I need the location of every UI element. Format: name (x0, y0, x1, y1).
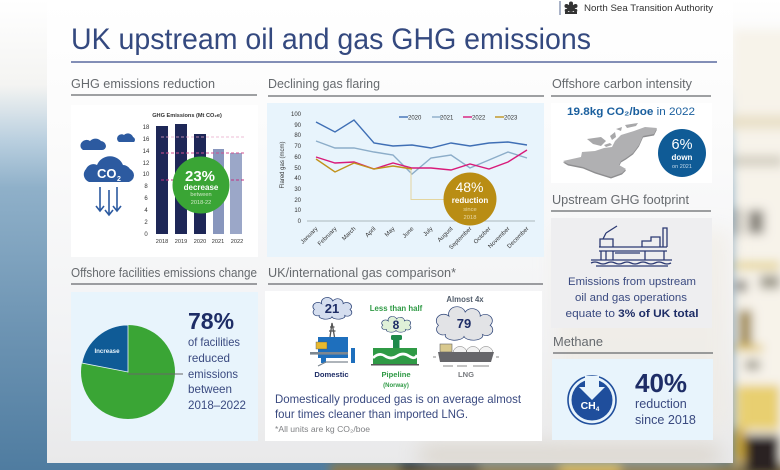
panel: GHG emissions reduction (71, 76, 258, 257)
panel: offshore carbon intensity: Offshore carbon intensity (552, 76, 692, 91)
pie chart: 78% reduced: Increase (94, 348, 120, 355)
note: units: *All units are kg CO₂/boe (275, 424, 370, 434)
logo: North Sea Transition Authority (560, 1, 714, 15)
line chart: flared gas by month: July (423, 226, 434, 238)
stat: 78% of facilities (188, 308, 246, 412)
stat: 40% reduction: reduction (635, 397, 687, 411)
bar chart: GHG emissions: 2021 (212, 239, 224, 245)
bar chart: GHG emissions: 14 (143, 149, 150, 155)
callout: 48% reduction: 48% (455, 179, 484, 195)
line chart: flared gas by month: October (473, 226, 492, 246)
panel: upstream GHG footprint: Upstream GHG footprint (552, 192, 689, 207)
callout: 48% reduction (444, 172, 496, 226)
bar chart: GHG emissions: GHG Emissions (Mt CO₂e) (152, 113, 222, 119)
bar chart: GHG emissions: 2 (144, 220, 148, 226)
domestic: cloud and platform (310, 297, 355, 379)
bar chart: GHG emissions: 2022 (231, 239, 243, 245)
line chart: flared gas by month: 10 (294, 208, 302, 214)
icon: CH4 down arrow: CH (581, 400, 596, 412)
text: 3% of UK total: equate to 3% of UK total (566, 308, 698, 320)
callout: 23% decrease: 23% (185, 168, 215, 185)
line chart: flared gas by month: 80 (294, 133, 302, 139)
callout: 23% decrease: decrease (184, 183, 219, 192)
callout: 23% decrease: 2018-22 (191, 200, 211, 206)
callout: 6% down (658, 129, 706, 177)
legend (399, 116, 518, 122)
pipeline: cloud and pipe (370, 304, 423, 389)
line chart: flared gas by month: March (341, 226, 357, 242)
text: comparison statement (275, 392, 522, 421)
line chart: flared gas by month: 30 (294, 187, 302, 193)
bar chart: GHG emissions: 10 (143, 172, 150, 178)
pipeline: cloud and pipe: Pipeline (381, 370, 411, 379)
bar chart: GHG emissions: 6 (144, 196, 148, 202)
text: 3% of UK total (566, 276, 698, 320)
stat: 78% of facilities: between (188, 382, 232, 396)
line chart: flared gas by month: 90 (294, 123, 302, 129)
line chart: flared gas by month: 70 (294, 144, 302, 150)
panel: declining gas flaring (267, 76, 544, 257)
pipeline: cloud and pipe: Less than half (370, 304, 423, 313)
stat: 40% reduction: since 2018 (635, 413, 696, 427)
domestic: cloud and platform: Domestic (314, 370, 349, 379)
panel: UK/international gas comparison: UK/international gas comparison* (268, 265, 456, 280)
pie chart: 78% reduced (81, 325, 183, 419)
stat: 78% of facilities: reduced (188, 351, 230, 365)
LNG: cloud and tanker: LNG (458, 370, 474, 379)
text: 3% of UK total: Emissions from upstream (568, 276, 696, 288)
panel: offshore facilities emissions change: Offshore facilities emissions change (71, 265, 257, 280)
line chart: flared gas by month: 20 (294, 198, 302, 204)
text: comparison statement: Domestically produced gas is on average almost (275, 392, 522, 406)
pipeline: cloud and pipe: (Norway) (383, 383, 409, 389)
callout: 6% down: on 2021 (672, 164, 692, 170)
legend: 2023 (504, 116, 518, 122)
stat: 78% of facilities: emissions (188, 367, 238, 381)
stat: 40% reduction (635, 368, 696, 427)
panel: methane (552, 334, 713, 440)
bar chart: GHG emissions: 16 (143, 137, 150, 143)
stat: 78% of facilities: of facilities (188, 335, 240, 349)
panel: upstream GHG footprint (551, 192, 712, 328)
callout: 6% down: 6% (672, 137, 693, 153)
callout: 23% decrease: between (190, 192, 212, 198)
icon: royal crest (564, 2, 578, 14)
line chart: flared gas by month: May (384, 226, 396, 238)
line chart: flared gas by month: Flared gas (mcm) (280, 141, 286, 189)
LNG: cloud and tanker: Almost 4x (446, 295, 484, 304)
line chart: flared gas by month: November (488, 226, 511, 250)
icon: CO2 clouds with arrows: CO (97, 166, 116, 181)
line chart: flared gas by month: 50 (294, 166, 302, 172)
line chart: flared gas by month: June (402, 226, 416, 240)
icon: offshore platform (591, 226, 672, 266)
line chart: flared gas by month: 0 (298, 219, 302, 225)
bar chart: GHG emissions: 8 (144, 184, 148, 190)
bar chart: GHG emissions (143, 113, 244, 245)
text: 3% of UK total: oil and gas operations (575, 292, 687, 304)
stat: 78% of facilities: 78% (188, 308, 234, 334)
bar chart: GHG emissions: 2018 (156, 239, 168, 245)
line chart: flared gas by month: August (437, 226, 455, 244)
bar chart: GHG emissions: 4 (144, 208, 148, 214)
legend: 2022 (472, 116, 486, 122)
line chart: flared gas by month: January (300, 226, 319, 246)
icon: CH4 down arrow (568, 376, 616, 424)
bar chart: GHG emissions: 0 (144, 232, 148, 238)
line chart: flared gas by month: December (507, 226, 530, 250)
callout: 48% reduction: 2018 (464, 215, 476, 221)
legend: 2020 (408, 116, 422, 122)
title: UK upstream oil and gas GHG emissions (71, 23, 591, 56)
line chart: flared gas by month: 40 (294, 176, 302, 182)
icon: CH4 down arrow: 4 (596, 406, 600, 413)
stat: 78% of facilities: 2018–2022 (188, 398, 246, 412)
panel: offshore facilities emissions change (71, 265, 258, 441)
text: comparison statement: four times cleaner than imported LNG. (275, 407, 468, 421)
LNG: cloud and tanker: 79 (457, 316, 471, 331)
icon: CO2 clouds with arrows: 2 (117, 176, 121, 183)
map: UK continental shelf (563, 123, 657, 178)
bar chart: GHG emissions: 2019 (175, 239, 187, 245)
pipeline: cloud and pipe: 8 (393, 318, 400, 332)
callout: 48% reduction: since (463, 207, 477, 213)
legend: 2021 (440, 116, 454, 122)
LNG: cloud and tanker (433, 295, 499, 379)
line chart: flared gas by month: 60 (294, 155, 302, 161)
logo: North Sea Transition Authority: North Sea Transition Authority (584, 3, 714, 13)
panel: UK/international gas comparison (265, 265, 543, 441)
panel: offshore carbon intensity (551, 76, 712, 183)
line chart: flared gas by month: February (317, 226, 338, 247)
icon: CO2 clouds with arrows (80, 133, 135, 215)
callout: 6% down: down (672, 153, 693, 162)
callout: 23% decrease (172, 156, 230, 214)
stat: 40% reduction: 40% (635, 368, 687, 398)
line chart: flared gas by month: April (365, 226, 377, 239)
line chart: flared gas by month: September (448, 226, 473, 251)
panel: offshore carbon intensity: 19.8kg CO₂/boe in 2022 (567, 106, 695, 118)
domestic: cloud and platform: 21 (325, 301, 339, 316)
callout: 48% reduction: reduction (452, 196, 488, 205)
bar chart: GHG emissions: 12 (143, 161, 150, 167)
panel: GHG emissions reduction: GHG emissions reduction (71, 76, 215, 91)
panel: declining gas flaring: Declining gas flaring (268, 76, 380, 91)
line chart: flared gas by month: 100 (291, 112, 302, 118)
bar chart: GHG emissions: 2020 (194, 239, 206, 245)
bar chart: GHG emissions: 18 (143, 125, 150, 131)
panel: methane: Methane (553, 334, 603, 349)
line chart: flared gas by month (280, 112, 535, 251)
